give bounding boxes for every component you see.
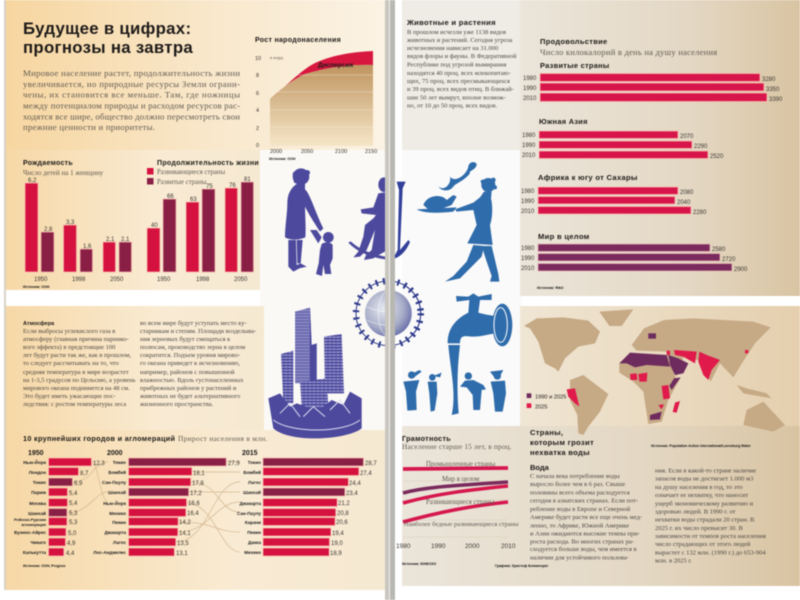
column 2000: 14,2: [179, 520, 191, 526]
literacy chart: [396, 434, 549, 568]
column 1950: Лондон: [29, 470, 46, 475]
atmosphere text: мирового океана поднимется на 48 см.: [23, 385, 130, 392]
population growth chart: 6: [256, 91, 259, 97]
water text: зависимости от темпов роста населения: [655, 533, 766, 540]
column 1950: 5,4: [69, 501, 78, 507]
atmosphere text: средняя температура в мире возрастет: [23, 369, 129, 376]
column 2000: Сан-Паулу: [102, 480, 126, 485]
atmosphere text: сократится. Подъем уровня мирово-: [140, 352, 240, 359]
world bars: [521, 232, 748, 273]
Sub-Saharan Africa bars: [521, 173, 707, 216]
population growth chart: Дисперсия: [318, 62, 353, 69]
column 1950: Москва: [29, 501, 46, 506]
intro text: увеличивается, но природные ресурсы Земли ограни-: [23, 79, 240, 89]
food chart: Число килокалорий в день на душу населения: [540, 47, 717, 57]
column 2000: Токио: [113, 460, 126, 465]
water text: вырастет с 132 млн. (1990 г.) до 653-904: [655, 550, 766, 556]
red regions: 2025: [567, 350, 748, 413]
atmosphere text: животных не будет альтернативного: [139, 393, 240, 400]
column 1950: Калькутта: [23, 550, 46, 555]
Sub-Saharan Africa bars: 1980: [521, 189, 535, 195]
water text: ния. Если в какой-то стране наличие: [655, 468, 756, 474]
developed countries bars: 3280: [762, 77, 776, 83]
life expectancy chart: 1998: [196, 277, 210, 283]
column 1950: 5,4: [69, 491, 78, 497]
icon: globe with ring of people: [356, 281, 421, 346]
atmosphere text: го океана приведет к исчезновению,: [140, 360, 240, 367]
atmosphere text: например, районов с повышенной: [140, 369, 235, 376]
column 2000: Мехико: [109, 511, 126, 516]
literacy chart: Грамотность: [402, 434, 451, 443]
connectors: [68, 462, 240, 552]
animals and plants text: находятся 40 проц. всех млекопитаю-: [407, 70, 511, 77]
Sub-Saharan Africa bars: 2040: [677, 200, 691, 206]
literacy chart: Источник: ЮНЕСКО: [402, 562, 437, 566]
South Asia bars: 2010: [522, 153, 536, 159]
column 2000: 2000: [107, 450, 123, 457]
title: Будущее в цифрах:: [23, 19, 191, 38]
column 2015: 28,7: [365, 461, 377, 467]
water text: и Азии ожидаются высокие темпы при-: [530, 530, 640, 538]
column 2015: Джакарта: [239, 501, 261, 506]
life expectancy chart: 66: [167, 194, 174, 200]
water shortage heading: Страны,: [530, 428, 563, 437]
column 2015: [237, 450, 377, 557]
water shortage heading: которым грозит: [530, 438, 594, 447]
column 2015: Дакка: [248, 540, 261, 545]
animals and plants text: Животные и растения: [406, 18, 496, 27]
animals and plants text: животных и растений. Сегодня угроза: [406, 37, 513, 44]
column 1950: 4,4: [66, 551, 75, 557]
population growth chart: Источник: ООН: [269, 157, 296, 161]
birth rate chart: Источник: ООН: [23, 285, 50, 289]
column 2015: 2015: [242, 450, 258, 457]
column 1950: Рейнско-Рурская: [14, 518, 46, 522]
icon: globe right half: [394, 278, 424, 349]
water text: ущерб экономическому развитию и: [655, 500, 754, 508]
birth rate chart: 2050: [110, 277, 124, 283]
column 1950: 5,3: [69, 511, 78, 517]
column 2015: 23,4: [346, 491, 358, 497]
water text: ленно, то Африке, Южной Америке: [530, 522, 629, 530]
column 1950: Шанхай: [28, 510, 46, 516]
column 1950: 6,9: [74, 481, 83, 487]
column 1950: Токио: [33, 480, 46, 485]
column 1950: агломерация: [22, 523, 46, 527]
developed countries bars: 3350: [766, 87, 780, 93]
water text: здоровью людей. В 1990 г. от: [655, 508, 736, 516]
birth rate chart: 2,8: [44, 227, 53, 233]
atmosphere text: то следует рассчитывать на то, что: [23, 360, 119, 367]
column 2015: 19,4: [332, 531, 344, 537]
intro text: ходятся все шире, общество должно пересмотреть свои: [23, 112, 240, 122]
water text: млн. в 2025 г.: [655, 558, 692, 564]
birth rate chart: 2,1: [106, 237, 115, 243]
world bars: 1980: [521, 246, 535, 252]
water text: нехватки воды страдали 20 стран. В: [655, 516, 755, 524]
South Asia bars: [522, 117, 724, 160]
population growth chart: 2: [256, 126, 259, 132]
column 2000: 17,2: [190, 491, 202, 497]
life expectancy chart: 40: [151, 223, 158, 229]
water text: ребление воды в Европе и Северной: [530, 506, 631, 513]
water text: сходуется больше воды, чем имеется в: [530, 546, 637, 553]
population growth chart: 2150: [365, 149, 377, 155]
icon: water tap with people drinking: [403, 293, 512, 415]
intro text: чены, их становится все меньше. Там, где ножницы: [23, 90, 240, 100]
literacy chart: 1980: [396, 543, 411, 550]
animals and plants text: но, от 10 до 50 проц. всех видов.: [407, 102, 498, 110]
water text: роста расхода. Во многих странах ра-: [530, 538, 634, 546]
atmosphere text: Если выбросы углекислого газа в: [23, 328, 115, 335]
population growth chart: 8: [256, 73, 259, 79]
column 2000: Шанхай: [108, 489, 126, 495]
column 1950: 1950: [28, 450, 44, 457]
animals and plants text: видов флоры и фауны. В Федеративной: [407, 53, 517, 60]
atmosphere text: во всем мире будут уступать место ку-: [140, 320, 247, 327]
column 2000: 27,9: [228, 461, 240, 467]
column 2015: 18,9: [330, 551, 342, 557]
column 2000: Джакарта: [104, 530, 126, 535]
column 2015: 27,4: [360, 471, 372, 477]
atmosphere text: [23, 320, 256, 408]
heading: 10 крупнейших городов и агломераций: [23, 434, 175, 443]
column 2015: Токио: [248, 460, 261, 465]
water text: 2025 г. их число превысит 30. В: [655, 525, 744, 532]
map legend: 1990 и 2025: [535, 394, 566, 400]
column 2000: Лос-Анджелес: [93, 550, 126, 555]
life expectancy chart: 75: [206, 184, 213, 190]
South Asia bars: 1990: [522, 143, 536, 149]
food chart: Источник: ФАО: [537, 286, 564, 290]
developed countries bars: 1980: [523, 76, 537, 82]
Sub-Saharan Africa bars: 1990: [521, 199, 535, 205]
animals and plants text: Республике под угрозой вымирания: [407, 62, 506, 68]
column 2000: 14,1: [179, 531, 191, 537]
column 2000: 17,8: [192, 481, 204, 487]
population growth chart: в млрд.: [270, 55, 284, 60]
column 2015: 21,2: [338, 501, 350, 507]
icon: woman carrying roast turkey: [417, 162, 499, 282]
chart heading: Рост народонаселения: [255, 37, 341, 44]
life expectancy chart: 76: [229, 183, 236, 189]
column 2015: 24,4: [349, 481, 361, 487]
developed countries bars: 2010: [523, 96, 537, 102]
developed countries bars: Развитые страны: [540, 61, 610, 70]
column 2000: Лагос: [113, 540, 126, 545]
water text: Америке будет расти все еще очень мед-: [530, 514, 642, 521]
column 2015: Шанхай: [243, 489, 261, 495]
developed countries bars: 3390: [769, 97, 783, 103]
animals and plants text: щих, 75 проц. всех пресмыкающихся: [407, 78, 510, 85]
column 2015: 20,6: [336, 520, 348, 526]
column 1950: Париж: [31, 490, 47, 495]
intro text: Мировое население растет, продолжительность жизни: [23, 68, 240, 78]
map legend: 2025: [535, 404, 548, 410]
world bars: 2900: [734, 267, 748, 273]
literacy chart: Наиболее бедные развивающиеся страны: [404, 521, 519, 528]
Sub-Saharan Africa bars: 2080: [680, 190, 694, 196]
purple regions: 1990 and 2025: [619, 333, 688, 420]
water text: выросло более чем в 6 раз. Свыше: [530, 481, 625, 488]
map source note: Источник: Population Action International/Lueneburg Water: [651, 444, 751, 448]
illustrations, left page colour: [268, 168, 421, 438]
animals and plants text: и 39 проц. всех видов птиц. В ближай-: [407, 86, 514, 93]
icon: city skyline: [268, 308, 362, 438]
column 1950: 4,9: [67, 541, 76, 547]
animals and plants text: исчезновения нависает на 31.000: [407, 45, 498, 52]
column 2015: Пекин: [247, 530, 261, 535]
developed countries bars: [523, 61, 783, 103]
legend: [147, 168, 226, 186]
legend: Развитые страны: [157, 179, 207, 186]
population growth chart: 0: [256, 143, 259, 149]
literacy chart: 2010: [501, 543, 516, 550]
birth rate chart: 1950: [34, 277, 48, 283]
world bars: 2720: [722, 257, 736, 263]
South Asia bars: 2290: [694, 144, 708, 150]
column 2000: Бомбей: [108, 469, 126, 475]
legend: Развивающиеся страны: [157, 169, 226, 176]
intro text: прежние ценности и приоритеты.: [23, 122, 155, 132]
birth rate chart: Рождаемость: [23, 160, 73, 167]
column 1950: Нью-Йорк: [23, 458, 47, 465]
life expectancy chart: 1950: [157, 277, 171, 283]
column 1950: 12,3: [93, 461, 105, 467]
column 1950: Буэнос-Айрес: [14, 529, 46, 535]
cities chart: [14, 434, 377, 568]
water text: половины всего объема расходуется: [530, 490, 630, 496]
column 2000: 13,1: [176, 551, 188, 557]
South Asia bars: 2520: [710, 154, 724, 160]
column 2000: Пекин: [112, 520, 126, 525]
birth rate chart: 1,6: [83, 244, 92, 250]
literacy chart: Мир в целом: [442, 476, 480, 483]
icon: mother and child: [285, 168, 334, 276]
world map of water shortage: [524, 309, 785, 435]
title: [23, 19, 193, 57]
life expectancy chart: 81: [244, 177, 251, 183]
birth rate chart: 3,3: [66, 220, 75, 226]
water text: наличии для устойчивого пользова-: [530, 554, 629, 562]
water text: число страдающих от этого людей: [655, 541, 751, 548]
South Asia bars: 1980: [522, 133, 536, 139]
column 2015: Карачи: [245, 520, 261, 525]
food chart: Продовольствие: [540, 37, 608, 46]
heading: Прирост населения в млн.: [178, 434, 268, 443]
icon: elderly person in rocking chair: [348, 177, 391, 260]
intro text: [23, 68, 240, 132]
literacy chart: Развивающиеся страны: [426, 499, 495, 506]
literacy chart: 1990: [431, 543, 446, 550]
heading: [23, 434, 268, 443]
gutter: [385, 0, 402, 600]
developed countries bars: 1990: [523, 86, 537, 92]
world bars: 2010: [521, 266, 535, 272]
population growth chart: 2000: [270, 149, 282, 155]
title: прогнозы на завтра: [23, 38, 193, 57]
life expectancy chart: Продолжительность жизни: [157, 160, 259, 167]
column 2015: Мехико: [244, 550, 261, 555]
map legend: [527, 393, 566, 410]
birth rate chart: Число детей на 1 женщину: [23, 169, 104, 177]
column 1950: [14, 450, 105, 568]
column 2015: 20,8: [337, 511, 349, 517]
column 2015: 19,0: [331, 541, 343, 547]
column 2000: 16,4: [187, 511, 199, 517]
atmosphere text: ледствия: с ростом температуры леса: [23, 401, 126, 408]
column 2000: 13,5: [177, 541, 189, 547]
column 2015: Сан-Паулу: [237, 511, 261, 516]
atmosphere text: лет будут расти так же, как в прошлом,: [23, 352, 131, 359]
atmosphere text: Атмосфера: [23, 320, 55, 327]
South Asia bars: 2070: [680, 134, 694, 140]
literacy chart: Промышленные страны: [426, 461, 496, 468]
population growth chart: [255, 37, 377, 161]
atmosphere text: полюсам, производство зерна в целом: [140, 344, 245, 351]
South Asia bars: Южная Азия: [539, 117, 588, 126]
water text: сегодня в азиатских странах. Если пот-: [530, 498, 638, 504]
column 2000: 16,6: [188, 501, 200, 507]
water text: [530, 463, 766, 564]
birth rate chart: 6,2: [28, 178, 37, 184]
population growth chart: 2100: [335, 149, 347, 155]
column 2000: [93, 450, 240, 557]
atmosphere text: старникам и степям. Площади возделыва-: [140, 328, 256, 335]
column 1950: 5,3: [69, 520, 78, 526]
Sub-Saharan Africa bars: 2280: [693, 210, 707, 216]
water shortage heading: нехватка воды: [530, 448, 590, 457]
water text: Вода: [530, 463, 550, 472]
atmosphere text: жизненного пространства.: [139, 401, 214, 408]
icon: rocking chair back: [395, 182, 410, 258]
column 2000: 18,1: [193, 471, 205, 477]
life expectancy chart: [147, 160, 259, 283]
column 2015: Бомбей: [243, 469, 261, 475]
animals and plants text: шие 50 лет вымрут, вполне возмож-: [407, 94, 506, 102]
column 1950: 5,0: [68, 531, 77, 537]
world bars: 1990: [521, 256, 535, 262]
column 2000: Нью-Йорк: [103, 499, 127, 506]
atmosphere text: вого эффекта) в предстоящие 100: [23, 344, 115, 351]
column 1950: Чикаго: [30, 540, 46, 545]
water shortage heading: [530, 428, 594, 457]
water text: С начала века потребление воды: [530, 473, 620, 480]
literacy chart: Население старше 15 лет, в проц.: [402, 442, 512, 451]
life expectancy chart: 2050: [234, 277, 248, 283]
atmosphere text: атмосферу (главная причина парнико-: [23, 336, 129, 343]
water text: на душу населения в год, то это: [655, 484, 743, 491]
intro text: между потенциалом природы и расходом ресурсов рас-: [23, 100, 240, 110]
column 1950: Источник: ООН, Prognos: [23, 564, 66, 568]
Sub-Saharan Africa bars: 2010: [521, 209, 535, 215]
food chart: [521, 37, 783, 290]
atmosphere text: на 1-3,5 градусов по Цельсию, а уровень: [23, 377, 136, 384]
life expectancy chart: 63: [190, 197, 197, 203]
column 2015: Лагос: [248, 480, 261, 485]
atmosphere text: влажностью. Вдоль густонаселенных: [140, 377, 244, 384]
population growth chart: 10: [255, 56, 261, 62]
Sub-Saharan Africa bars: Африка к югу от Сахары: [538, 173, 638, 182]
illustrations, right page colour: [394, 161, 514, 416]
population growth chart: 2050: [301, 149, 313, 155]
column 1950: 8,7: [80, 471, 89, 477]
population growth chart: 4: [256, 108, 259, 114]
world bars: 2580: [712, 247, 726, 253]
water text: запасов воды не достигает 1.000 м3: [655, 476, 753, 482]
water text: означает ее нехватку, что наносит: [655, 492, 748, 499]
atmosphere text: ния зерновых будут смещаться к: [140, 336, 231, 343]
continents: [524, 309, 785, 435]
birth rate chart: [23, 160, 132, 289]
birth rate chart: 2,1: [121, 237, 130, 243]
world bars: Мир в целом: [538, 232, 590, 241]
literacy chart: Графика: Кристоф Блюменрат: [495, 564, 549, 568]
birth rate chart: 1998: [72, 277, 86, 283]
literacy chart: 2000: [465, 543, 480, 550]
animals and plants text: [406, 18, 517, 110]
atmosphere text: Это будет иметь ужасающие пос-: [23, 393, 116, 400]
atmosphere text: прибрежных районов у растений и: [140, 385, 237, 392]
animals and plants text: В прошлом исчезли уже 1138 видов: [407, 29, 506, 36]
